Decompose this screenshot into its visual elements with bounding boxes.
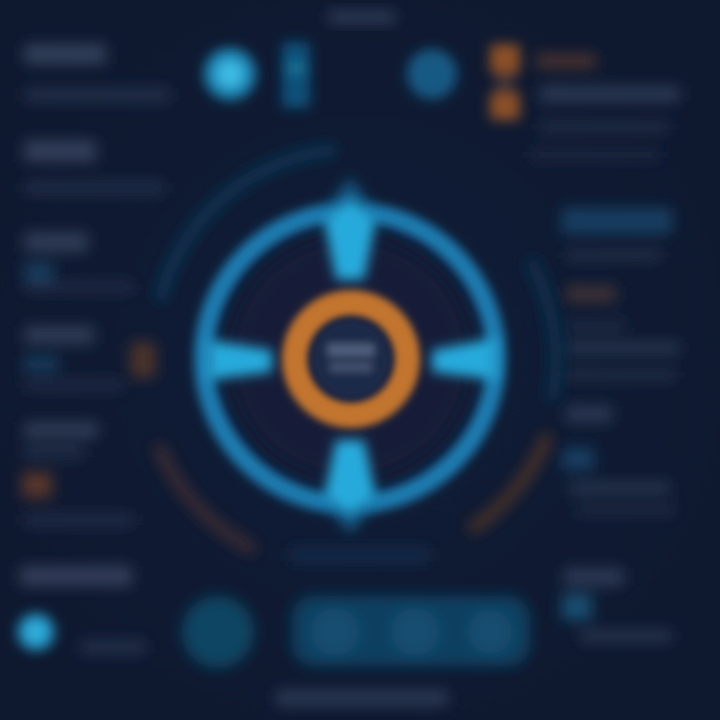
text block: left 4 [24,326,124,390]
arrow: left spoke [208,340,272,380]
main blue ring [204,212,496,504]
panel: left column text blocks [20,44,170,654]
text block: above bottom row [290,548,430,562]
text block: right 5 [562,568,672,642]
inner dark disc [228,236,472,480]
panel: bottom row shapes [182,548,530,706]
text block: right 2 [566,286,626,330]
text block: right 1 [562,208,672,260]
title [328,10,396,24]
arrow: bottom spoke [324,440,376,514]
icon: left small orange marker [130,342,156,378]
bottom wide bar [292,596,530,666]
center label [311,319,391,399]
spokes [208,200,496,514]
icon: bottom-left cyan dot [17,613,55,651]
arrow: right spoke [432,338,496,380]
icon: top cyan circle [204,48,256,100]
text block: left 3 [24,232,134,292]
text block: right 3 [566,342,680,380]
text block: left 5 [22,422,134,526]
text block: left 6 [20,566,146,654]
icon: bottom left circle [182,596,254,668]
panel: right column text blocks [562,208,680,642]
text block: left 2 [24,140,164,194]
arrow: top spoke [324,200,376,280]
orange ring [295,303,407,415]
icon: top orange bars [490,44,520,120]
spoke tips: faint cones beyond the ring [326,178,374,534]
text block: left 1 [24,44,170,102]
text block: top right [530,54,680,160]
icon: top blue circle [407,49,457,99]
chart: hub diagram [130,150,556,550]
icon: top teal bar [282,42,310,108]
text block: footer [276,690,448,706]
outer faint arcs [158,150,556,550]
text block: right 4 [562,406,676,514]
